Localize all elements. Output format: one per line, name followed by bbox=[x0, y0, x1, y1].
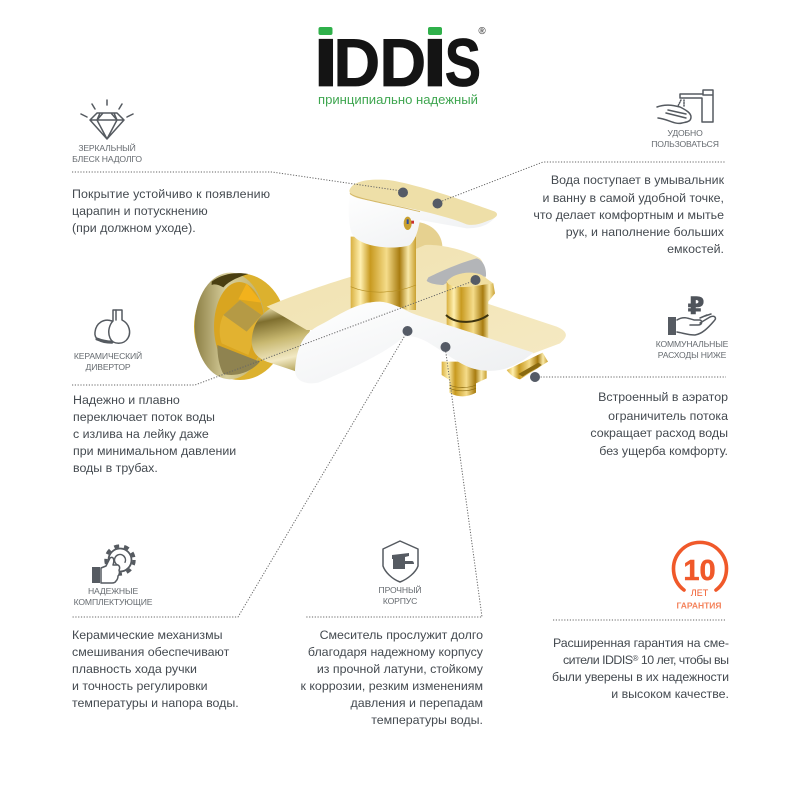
handle lever bbox=[349, 180, 497, 225]
text: body: давления и перепадам bbox=[351, 696, 483, 710]
logo: IDDIS: I bbox=[313, 25, 339, 101]
text: ceramic mechanisms: и точность регулировки bbox=[72, 679, 208, 693]
text: water supply bbox=[533, 173, 725, 256]
text: body: благодаря надежному корпусу bbox=[308, 645, 484, 659]
bottom connector bbox=[442, 362, 487, 396]
label: ceramic diverter: КЕРАМИЧЕСКИЙ bbox=[74, 350, 142, 361]
text: warranty bbox=[552, 636, 729, 701]
text: body: температуры воды. bbox=[371, 713, 483, 727]
cartridge cylinder bbox=[351, 237, 416, 310]
text: ceramic mechanisms: плавность хода ручки bbox=[72, 662, 197, 676]
label: lower utility bills: КОММУНАЛЬНЫЕ bbox=[656, 339, 729, 349]
label: reliable components: КОМПЛЕКТУЮЩИЕ bbox=[74, 597, 153, 607]
label: strong body: КОРПУС bbox=[383, 596, 417, 606]
label: strong body bbox=[379, 584, 421, 606]
text: diverter: переключает поток воды bbox=[73, 410, 215, 424]
text: water supply: Вода поступает в умывальник bbox=[551, 173, 725, 187]
text: coating: Покрытие устойчиво к появлению bbox=[72, 187, 270, 201]
label: lower utility bills: РАСХОДЫ НИЖЕ bbox=[658, 350, 727, 360]
text: aerator: без ущерба комфорту. bbox=[599, 444, 728, 458]
text: warranty: ® bbox=[633, 654, 639, 663]
text: diverter: Надежно и плавно bbox=[73, 393, 180, 407]
label: ceramic diverter: ДИВЕРТОР bbox=[86, 362, 131, 372]
text: ceramic mechanisms: температуры и напора воды. bbox=[72, 696, 239, 710]
temperature indicator bbox=[404, 217, 414, 230]
text: diverter: воды в трубах. bbox=[73, 461, 158, 475]
logo: IDDIS: I bbox=[422, 25, 448, 101]
leader lines bbox=[72, 162, 726, 620]
hex nut bbox=[220, 300, 262, 355]
logo: IDDIS: D bbox=[380, 26, 426, 101]
text: body: из прочной латуни, стойкому bbox=[317, 662, 484, 676]
grey window bbox=[427, 258, 486, 285]
text: aerator bbox=[590, 390, 728, 458]
text: warranty: были уверены в их надежности bbox=[552, 670, 729, 684]
logo: IDDIS bbox=[313, 25, 486, 107]
white handle base bbox=[349, 190, 497, 248]
text: aerator: ограничитель потока bbox=[608, 409, 728, 423]
aerator bbox=[507, 353, 548, 379]
label: mirror shine bbox=[72, 142, 142, 164]
icon: ceramic diverter bbox=[95, 310, 130, 343]
text: aerator: сокращает расход воды bbox=[590, 426, 728, 440]
text: body: к коррозии, резким изменениям bbox=[300, 679, 483, 693]
label: lower utility bills bbox=[656, 339, 729, 360]
label: convenient use: ПОЛЬЗОВАТЬСЯ bbox=[651, 139, 719, 149]
icon: thumb and gear bbox=[92, 546, 134, 583]
logo: IDDIS: ® bbox=[478, 26, 486, 37]
label: strong body: ПРОЧНЫЙ bbox=[379, 584, 421, 595]
text: water supply: что делает комфортным и мытье bbox=[533, 208, 724, 222]
wall flange bbox=[194, 273, 286, 380]
label: reliable components: НАДЕЖНЫЕ bbox=[88, 586, 138, 596]
logo: IDDIS: принципиально надежный bbox=[318, 92, 478, 107]
text: water supply: рук, и наполнение больших bbox=[566, 225, 725, 239]
text: ceramic mechanisms: смешивания обеспечивают bbox=[72, 645, 230, 659]
text: body: Смеситель прослужит долго bbox=[320, 628, 483, 642]
text: coating: царапин и потускнению bbox=[72, 204, 208, 218]
label: ceramic diverter bbox=[74, 350, 142, 372]
label: convenient use bbox=[651, 128, 719, 149]
icon: hand under faucet bbox=[657, 90, 713, 123]
text: warranty: сители IDDIS bbox=[563, 653, 633, 667]
icon: 10 year warranty: ЛЕТ bbox=[691, 588, 709, 598]
text: warranty: Расширенная гарантия на сме- bbox=[553, 636, 729, 650]
icon: ruble and hand bbox=[668, 293, 715, 335]
text: diverter bbox=[73, 393, 236, 475]
logo: IDDIS: D bbox=[334, 26, 380, 101]
text: diverter: при минимальном давлении bbox=[73, 444, 236, 458]
icon: 10 year warranty: ГАРАНТИЯ bbox=[676, 600, 722, 610]
icon: 10 year warranty bbox=[674, 542, 726, 610]
icon: shield with faucet bbox=[383, 541, 418, 582]
text: coating bbox=[72, 187, 270, 235]
text: diverter: с излива на лейку даже bbox=[73, 427, 209, 441]
text: warranty: 10 лет, чтобы вы bbox=[638, 653, 729, 667]
label: mirror shine: БЛЕСК НАДОЛГО bbox=[72, 154, 142, 164]
wall flange behind handle bbox=[415, 222, 442, 250]
text: ceramic mechanisms: Керамические механизмы bbox=[72, 628, 223, 642]
label: convenient use: УДОБНО bbox=[667, 128, 703, 138]
text: water supply: емкостей. bbox=[667, 242, 724, 256]
label: reliable components bbox=[74, 586, 153, 607]
logo: IDDIS: S bbox=[445, 25, 481, 101]
text: coating: (при должном уходе). bbox=[72, 221, 196, 235]
text: warranty: и высоком качестве. bbox=[611, 687, 729, 701]
text: body bbox=[300, 628, 484, 727]
faucet illustration bbox=[194, 180, 566, 396]
white spout bbox=[295, 302, 533, 383]
body top plate bbox=[267, 245, 566, 353]
icon: 10 year warranty: 10 bbox=[683, 555, 716, 587]
label: mirror shine: ЗЕРКАЛЬНЫЙ bbox=[78, 142, 136, 153]
diverter knob bbox=[446, 273, 495, 343]
callout dots bbox=[398, 188, 540, 382]
text: ceramic mechanisms bbox=[72, 628, 239, 710]
body barrel bbox=[252, 305, 313, 372]
text: water supply: и ванну в самой удобной точке, bbox=[542, 191, 724, 205]
text: aerator: Встроенный в аэратор bbox=[598, 390, 728, 404]
icon: diamond bbox=[81, 100, 133, 139]
icon: ruble and hand: ₽ bbox=[688, 293, 704, 320]
